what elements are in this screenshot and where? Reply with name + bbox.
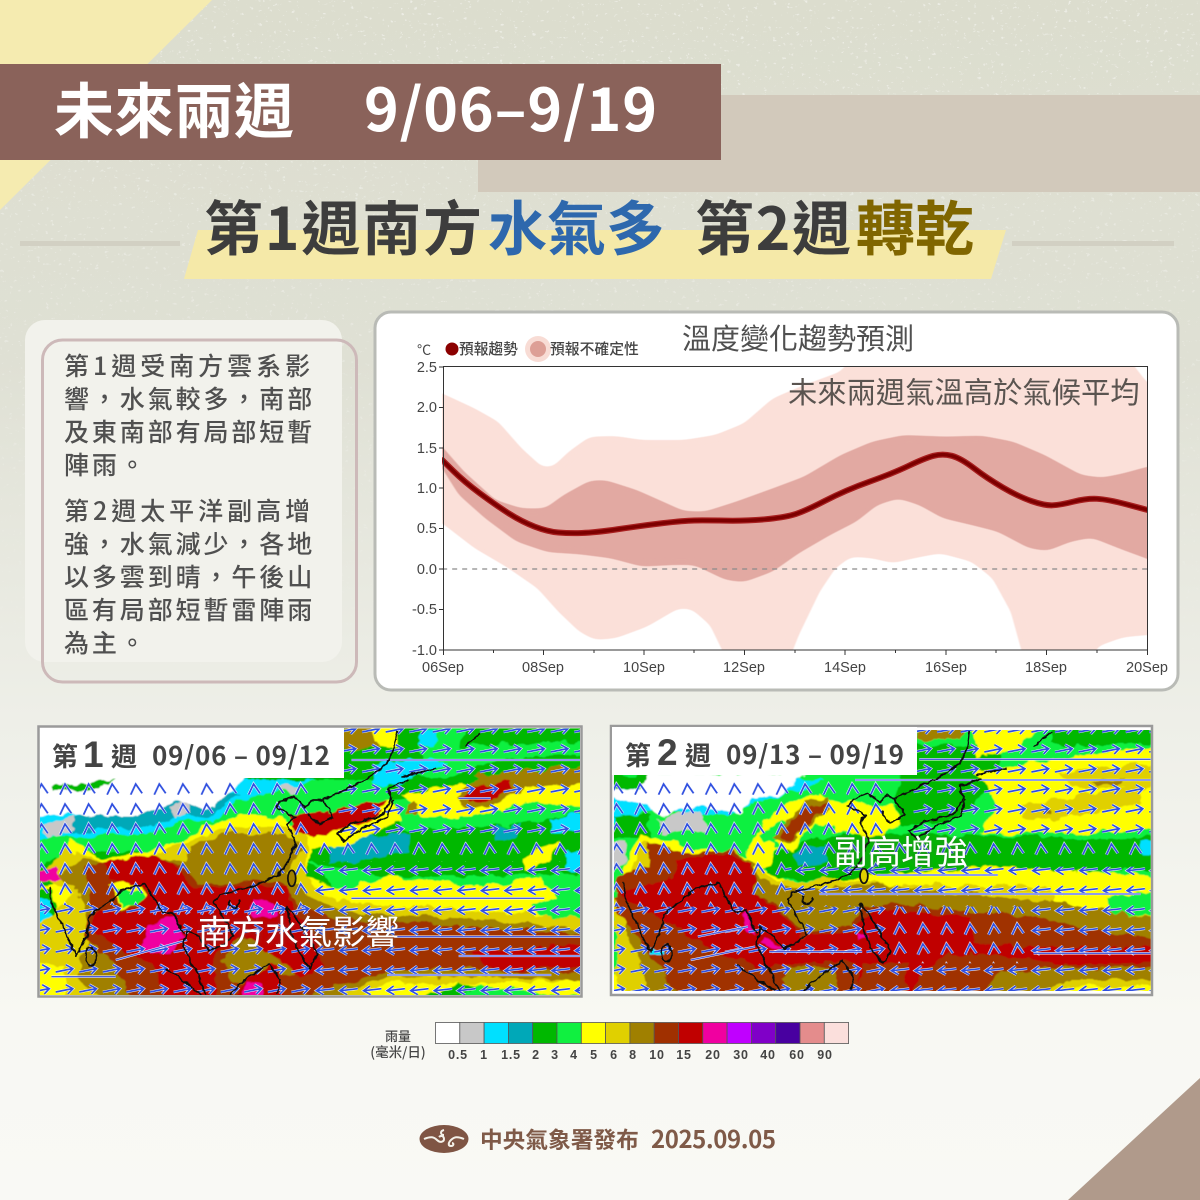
title bar: 未來兩週 (54, 64, 294, 151)
text block: week 1: 響，水氣較多，南部 (64, 380, 315, 416)
map label: week 2: 第 (625, 736, 651, 773)
panel: description text (25, 320, 356, 682)
coastlines (50, 730, 480, 995)
map label: week 1: 週 (111, 737, 137, 774)
map label: week 2 (612, 727, 917, 775)
text block: week 1: 陣雨。 (64, 446, 148, 482)
trend line (442, 455, 1148, 533)
map label: week 1: 第 (52, 737, 78, 774)
colour bar (436, 1022, 849, 1044)
x axis labels: 16Sep (925, 660, 967, 676)
scale labels: 2 (532, 1048, 540, 1062)
x axis labels: 08Sep (522, 660, 564, 676)
title bar (0, 63, 721, 160)
chart annotation: 未來兩週氣溫高於氣候平均 (788, 370, 1140, 412)
text block: week 2 (64, 492, 315, 660)
heading: 轉乾 (856, 182, 974, 267)
scale labels: 1 (480, 1048, 488, 1062)
text block: week 1 (64, 347, 315, 482)
legend title: 雨量 (385, 1026, 411, 1045)
y axis labels: 2.0 (417, 400, 437, 416)
scale labels: 5 (590, 1048, 598, 1062)
scale labels: 30 (733, 1048, 749, 1062)
y axis labels: -0.5 (412, 602, 437, 618)
decoration: brown corner triangle (1068, 1078, 1200, 1200)
map label: week 1: 09/06 – 09/12 (152, 736, 330, 773)
x axis labels: 10Sep (623, 660, 665, 676)
scale labels: 1.5 (501, 1048, 521, 1062)
icon: agency logo (420, 1125, 468, 1153)
text block: week 1: 第1週受南方雲系影 (64, 347, 313, 383)
scale labels: 8 (629, 1048, 637, 1062)
y axis labels: 1.0 (417, 481, 437, 497)
y axis labels: 0.5 (417, 521, 437, 537)
x axis labels: 18Sep (1025, 660, 1067, 676)
heading: 第1週南方 (204, 182, 482, 267)
x axis labels: 12Sep (723, 660, 765, 676)
scale labels: 3 (551, 1048, 559, 1062)
map annotation: 南方水氣影響 (198, 905, 399, 954)
legend title (370, 1026, 426, 1061)
legend: 預報趨勢 (459, 338, 518, 359)
decoration: secondary band (478, 95, 1200, 192)
heading: 水氣多 (488, 182, 665, 267)
heading (20, 182, 1174, 279)
text block: week 2: 區有局部短暫雷陣雨 (64, 591, 315, 627)
axes (439, 366, 1148, 655)
x axis labels: 06Sep (422, 660, 464, 676)
legend: °C (417, 340, 431, 360)
legend (417, 336, 639, 362)
legend: rainfall colour scale (370, 1022, 849, 1062)
text block: week 2: 為主。 (64, 624, 148, 660)
text block: week 2: 第2週太平洋副高增 (64, 492, 313, 528)
map: rainfall and wind field (614, 730, 1151, 991)
publisher text (480, 1120, 776, 1155)
scale labels (448, 1048, 833, 1062)
map label: week 2: 09/13 – 09/19 (726, 735, 904, 772)
scale labels: 15 (676, 1048, 692, 1062)
scale labels: 6 (610, 1048, 618, 1062)
plot area (442, 367, 1147, 650)
y axis labels: -1.0 (412, 643, 437, 659)
scale labels: 10 (649, 1048, 665, 1062)
legend: 預報不確定性 (550, 338, 639, 359)
scale labels: 4 (570, 1048, 578, 1062)
map label: week 1: 1 (83, 734, 104, 775)
title bar: 9/06–9/19 (364, 63, 657, 148)
map label: week 1 (40, 728, 344, 778)
y axis labels: 0.0 (417, 562, 437, 578)
footer (420, 1120, 776, 1155)
scale labels: 90 (817, 1048, 833, 1062)
y axis labels (412, 360, 437, 659)
map label: week 2: 週 (685, 736, 711, 773)
map annotation: 副高增強 (834, 825, 968, 874)
x axis labels: 14Sep (824, 660, 866, 676)
publisher text: 2025.09.05 (651, 1120, 776, 1155)
x axis labels: 20Sep (1126, 660, 1168, 676)
decoration: yellow corner triangle (0, 0, 212, 210)
panel: temperature trend chart (375, 312, 1186, 690)
chart title: 溫度變化趨勢預測 (682, 316, 914, 358)
text block: week 2: 強，水氣減少，各地 (64, 525, 315, 561)
scale labels: 40 (760, 1048, 776, 1062)
scale labels: 20 (705, 1048, 721, 1062)
scale labels: 60 (789, 1048, 805, 1062)
publisher text: 中央氣象署發布 (480, 1122, 639, 1155)
wind arrows (40, 728, 580, 995)
text block: week 2: 以多雲到晴，午後山 (64, 558, 315, 594)
wind arrows (614, 730, 1151, 991)
coastlines (623, 730, 1051, 991)
map label: week 2: 2 (657, 732, 678, 773)
text block: week 1: 及東南部有局部短暫 (64, 413, 315, 449)
x axis labels (422, 660, 1168, 676)
panel: week 1 rainfall map (37, 725, 583, 998)
page background (0, 0, 1200, 774)
map: rainfall and wind field (40, 728, 580, 995)
legend title: (毫米/日) (370, 1041, 426, 1061)
y axis labels: 1.5 (417, 441, 437, 457)
panel: week 2 rainfall map (610, 724, 1154, 996)
y axis labels: 2.5 (417, 360, 437, 376)
scale labels: 0.5 (448, 1048, 468, 1062)
heading: 第2週 (695, 182, 851, 267)
